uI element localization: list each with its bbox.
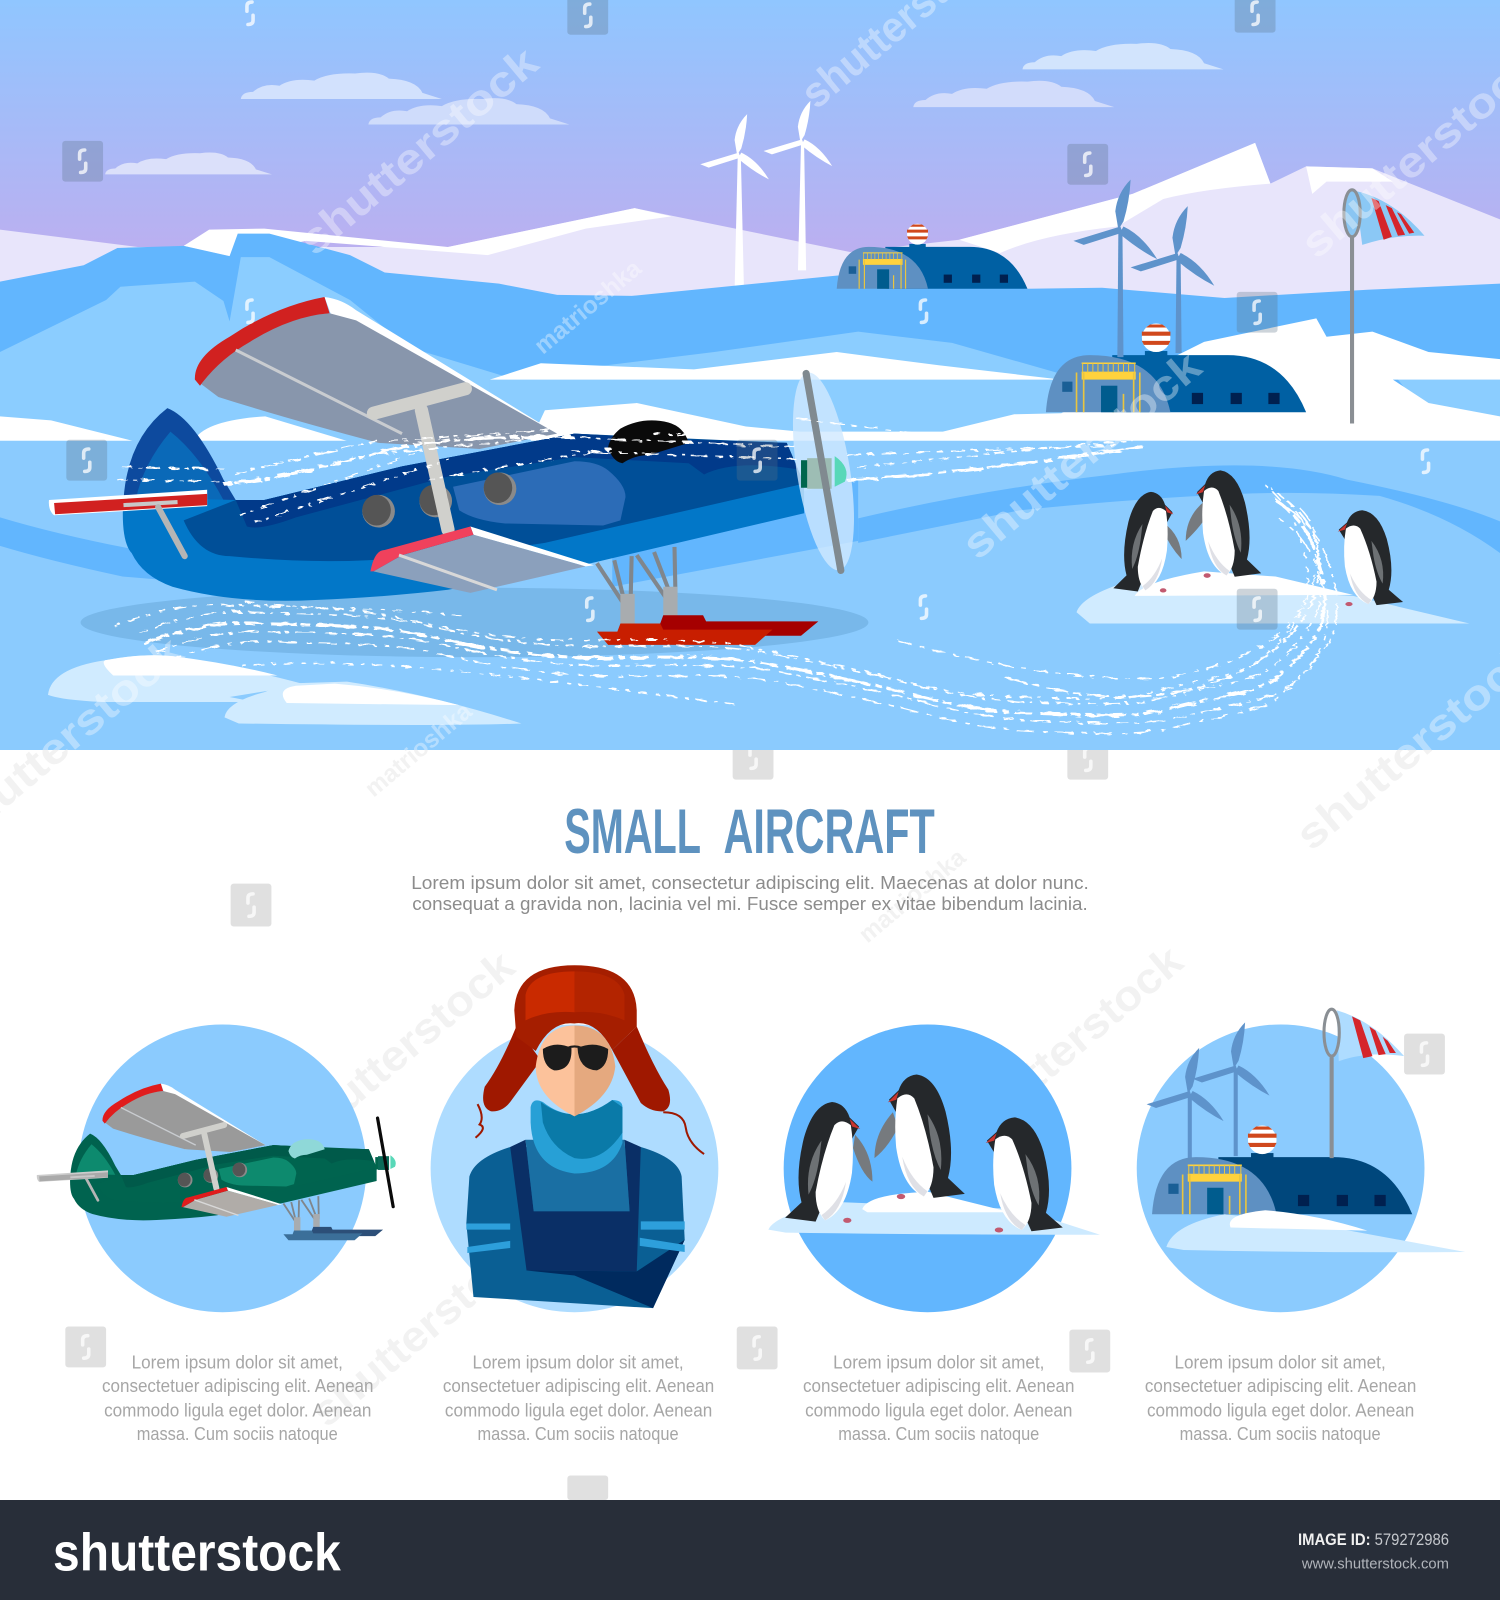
column text 3: Lorem ipsum dolor sit amet, — [833, 1351, 1044, 1372]
column text 4 — [1145, 1351, 1416, 1444]
column text 4: massa. Cum sociis natoque — [1180, 1423, 1381, 1444]
small aircraft, blue — [49, 297, 865, 645]
penguin ice floe — [1077, 571, 1469, 623]
clouds — [105, 43, 1223, 174]
column text 3 — [803, 1351, 1074, 1444]
blue wind turbines — [1073, 180, 1214, 357]
column text 3: consectetuer adipiscing elit. Aenean — [803, 1375, 1074, 1396]
column text 2: consectetuer adipiscing elit. Aenean — [443, 1375, 714, 1396]
lower watermarks: matrioshka — [854, 844, 972, 948]
column text 3: massa. Cum sociis natoque — [838, 1423, 1039, 1444]
hero watermarks: shutterstock — [953, 342, 1211, 569]
far research base — [837, 224, 1027, 289]
sea bands — [0, 465, 1500, 587]
column text 1: consectetuer adipiscing elit. Aenean — [102, 1375, 373, 1396]
icon: research base with turbines — [1137, 1009, 1465, 1312]
distant snowy mountains — [0, 143, 1500, 316]
windsock — [1324, 1009, 1404, 1158]
sky background — [0, 0, 1500, 255]
white lower section — [0, 750, 1500, 1500]
light iceberg faces — [0, 257, 1500, 444]
column text 2 — [443, 1351, 714, 1444]
windsock on pole — [1344, 190, 1424, 423]
column text 1: Lorem ipsum dolor sit amet, — [132, 1351, 343, 1372]
fur hat with flaps — [483, 965, 670, 1111]
intro text: Lorem ipsum dolor sit amet, consectetur adipiscing elit. Maecenas at dolor nunc. — [411, 872, 1089, 893]
lower watermarks: matrioshka — [360, 698, 478, 803]
title: AIRCRAFT — [723, 797, 935, 867]
hat strings — [476, 1104, 704, 1154]
intro text: consequat a gravida non, lacinia vel mi. Fusce semper ex vitae bibendum lacinia. — [412, 893, 1088, 914]
hero watermarks: shutterstock — [290, 38, 548, 265]
snow drift — [1166, 1214, 1465, 1252]
intro text — [411, 872, 1089, 914]
footer logo: shutterstock — [53, 1523, 341, 1582]
penguins — [1113, 470, 1403, 606]
lower watermarks — [0, 750, 1445, 1500]
icon: penguins on ice — [768, 1024, 1100, 1312]
hero watermarks: matrioshka — [529, 255, 647, 360]
white wind turbines — [700, 101, 832, 286]
title — [564, 797, 935, 867]
column text 3: commodo ligula eget dolor. Aenean — [805, 1399, 1072, 1420]
title: SMALL — [564, 797, 701, 867]
brush wake strokes — [115, 418, 1337, 734]
lower watermarks: shutterstock — [282, 942, 524, 1156]
column text 2: commodo ligula eget dolor. Aenean — [445, 1399, 712, 1420]
plane shadow on ice — [81, 588, 868, 657]
hero watermarks — [0, 0, 1500, 860]
column text 1 — [102, 1351, 373, 1444]
column text 1: massa. Cum sociis natoque — [137, 1423, 338, 1444]
column text 1: commodo ligula eget dolor. Aenean — [104, 1399, 371, 1420]
near research base — [1046, 323, 1306, 412]
frozen sea — [0, 441, 1500, 750]
lower watermarks: shutterstock — [302, 1222, 544, 1436]
icon: green aircraft in circle — [37, 1024, 404, 1312]
blue icebergs and horizon — [0, 234, 1500, 444]
overalls — [466, 1140, 685, 1308]
lower left ice floes — [48, 655, 521, 725]
hero watermark squares — [62, 0, 1429, 630]
scarf — [531, 1100, 622, 1173]
column text 4: commodo ligula eget dolor. Aenean — [1147, 1399, 1414, 1420]
icon: pilot portrait — [431, 965, 718, 1312]
column text 4: consectetuer adipiscing elit. Aenean — [1145, 1375, 1416, 1396]
footer image id: IMAGE ID: 579272986 — [1298, 1531, 1449, 1549]
lower watermarks: shutterstock — [950, 937, 1192, 1151]
white ice shelves — [0, 318, 1500, 441]
column text 2: massa. Cum sociis natoque — [478, 1423, 679, 1444]
jacket — [466, 1147, 685, 1308]
face — [536, 1026, 574, 1116]
sunglasses — [543, 1045, 608, 1070]
column text 4: Lorem ipsum dolor sit amet, — [1174, 1351, 1386, 1372]
hero watermarks: matrioshka — [360, 698, 478, 803]
footer url: www.shutterstock.com — [1301, 1556, 1449, 1572]
column text 2: Lorem ipsum dolor sit amet, — [472, 1351, 684, 1372]
footer bar — [0, 1500, 1500, 1600]
hero scene panel — [0, 0, 1500, 860]
